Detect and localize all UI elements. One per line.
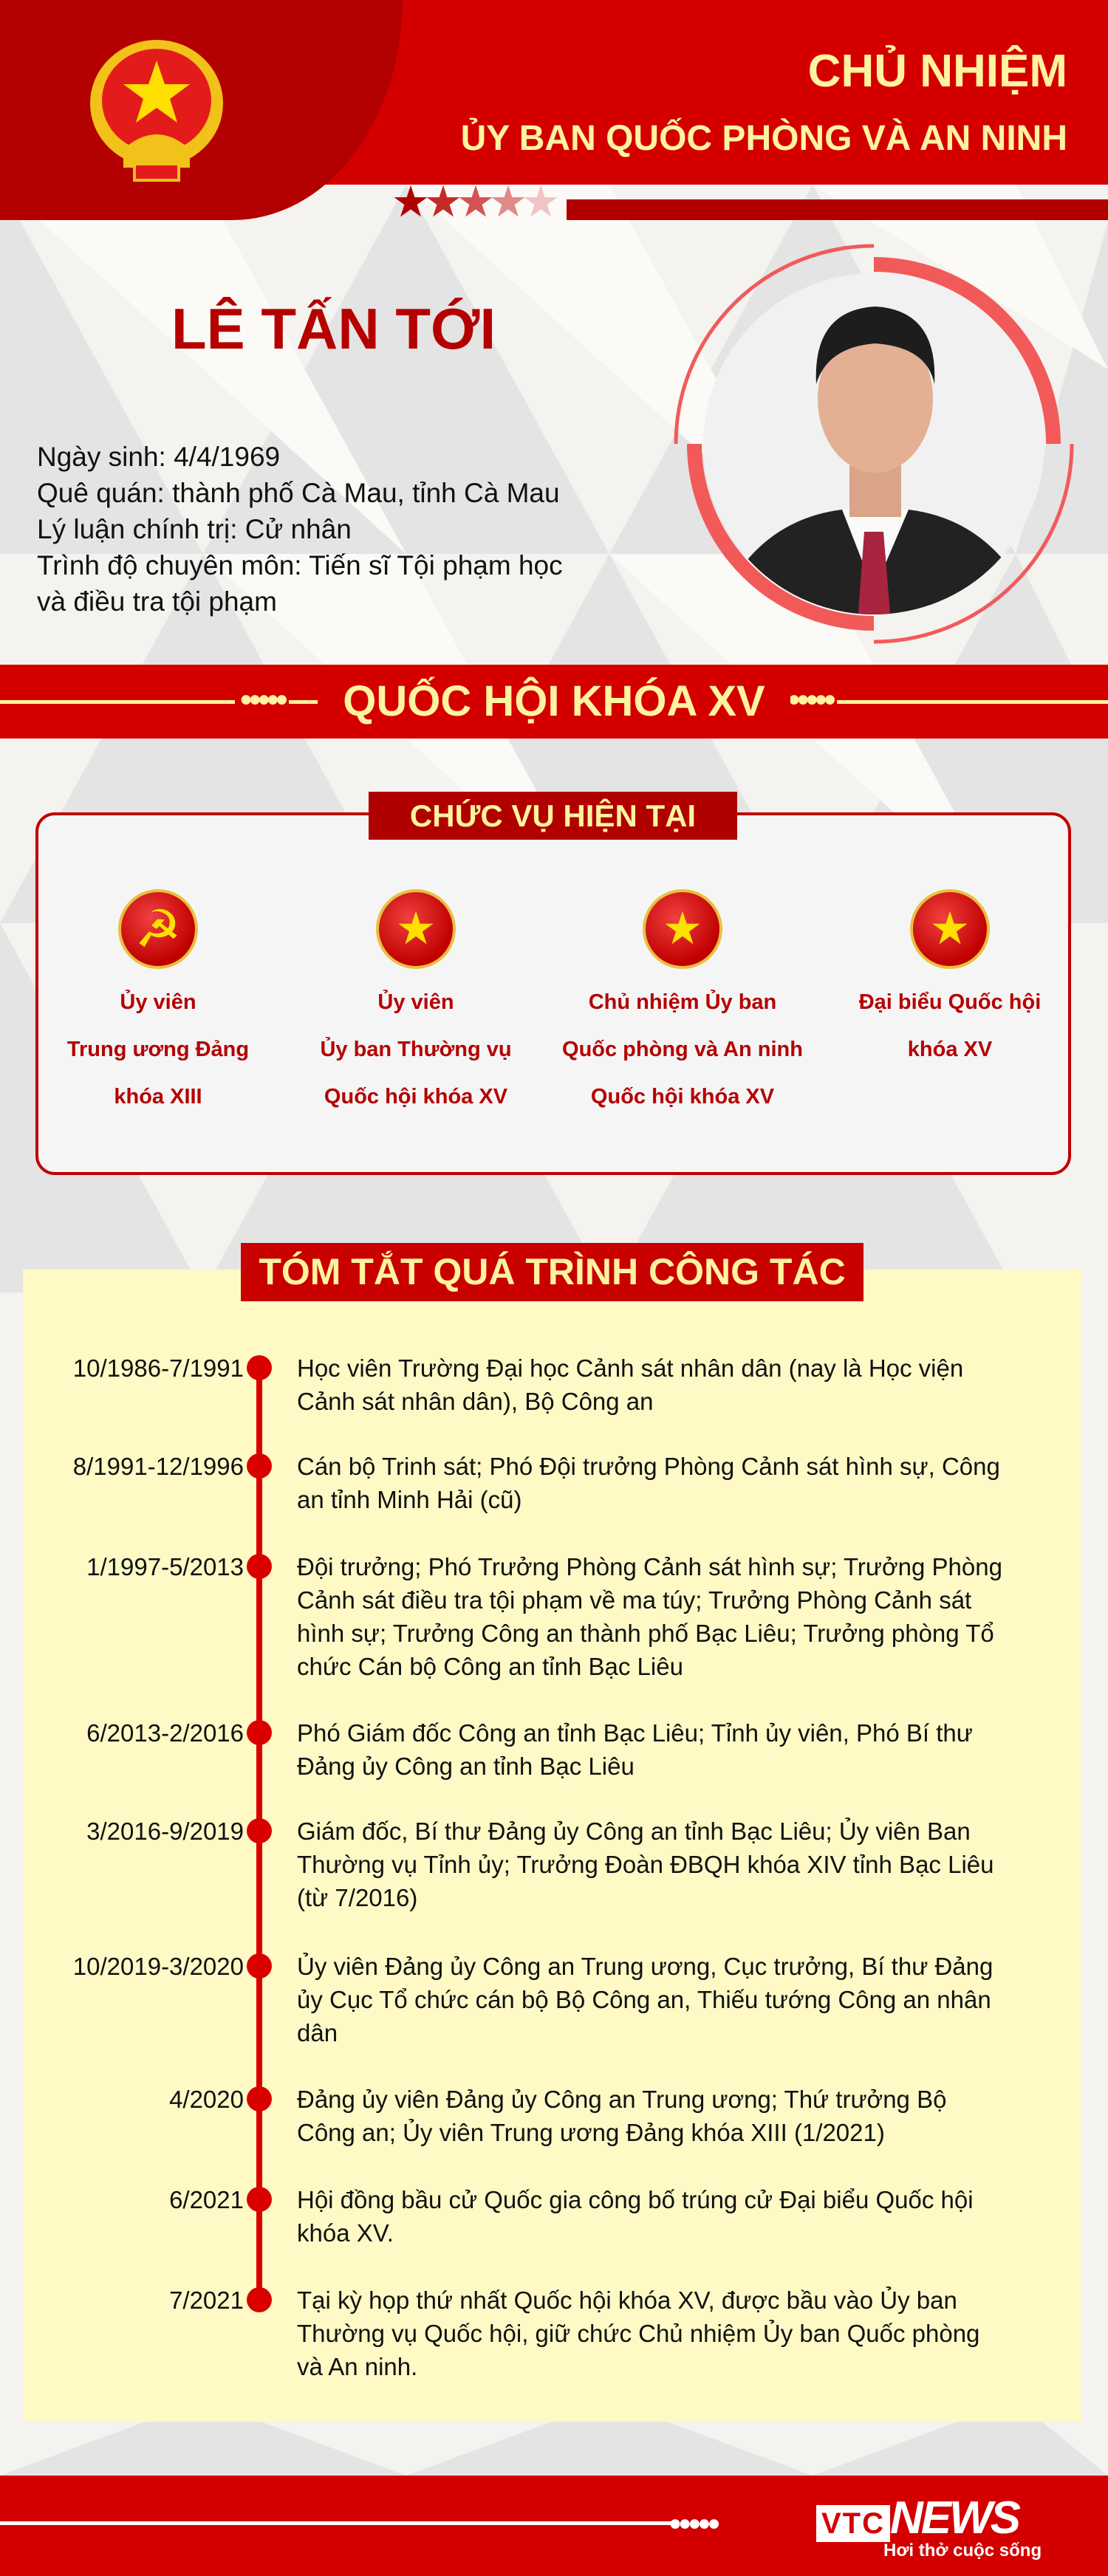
band: Quốc hội khóa XV: QUỐC HỘI KHÓA XV (343, 677, 765, 725)
position 1: Ủy viên (120, 990, 196, 1014)
heading: Chức vụ hiện tại: CHỨC VỤ HIỆN TẠI (410, 798, 696, 833)
entry 4: Đảng ủy Công an tỉnh Bạc Liêu (297, 1753, 635, 1780)
logo: VTC News (816, 2493, 1042, 2560)
entry 5: Giám đốc, Bí thư Đảng ủy Công an tỉnh Bạc Liêu; Ủy viên Ban (297, 1818, 971, 1845)
entry 1: Học viên Trường Đại học Cảnh sát nhân dân (nay là Học viện (297, 1354, 963, 1382)
entry 1 (73, 1354, 963, 1415)
entry 7: Đảng ủy viên Đảng ủy Công an Trung ương; Thứ trưởng Bộ (297, 2086, 946, 2113)
stars: ★★★★★ (393, 183, 555, 222)
position 2: Ủy ban Thường vụ (320, 1038, 512, 1061)
position 1: Trung ương Đảng (67, 1038, 249, 1061)
entry 3: hình sự; Trưởng Công an thành phố Bạc Liêu; Trưởng phòng Tổ (297, 1620, 994, 1647)
title: CHỦ NHIỆM (808, 46, 1067, 97)
entry 4 (86, 1719, 973, 1780)
icon: state emblem 1 (376, 889, 456, 969)
portrait (674, 244, 1074, 644)
position 2 (320, 990, 512, 1109)
position 4: Đại biểu Quốc hội (859, 990, 1041, 1014)
position 4: khóa XV (908, 1038, 992, 1061)
position 1 (67, 990, 249, 1109)
entry 9 (169, 2286, 979, 2380)
entry 3: Đội trưởng; Phó Trưởng Phòng Cảnh sát hình sự; Trưởng Phòng (297, 1553, 1002, 1580)
position 2: Ủy viên (377, 990, 454, 1014)
header bar (567, 199, 1108, 220)
logo: VTC News: VTCNEWS (821, 2493, 1019, 2544)
footer (0, 2476, 1108, 2576)
header dark corner (0, 0, 403, 220)
icon: party emblem (118, 889, 198, 969)
position 3: Quốc hội khóa XV (591, 1085, 774, 1109)
entry 9: và An ninh. (297, 2353, 417, 2380)
entry 6: dân (297, 2019, 338, 2046)
entry 6: ủy Cục Tổ chức cán bộ Bộ Công an, Thiếu tướng Công an nhân (297, 1986, 991, 2013)
personal info: Quê quán: thành phố Cà Mau, tỉnh Cà Mau (37, 478, 560, 508)
personal info: Lý luận chính trị: Cử nhân (37, 514, 352, 544)
entry 8: Hội đồng bầu cử Quốc gia công bố trúng cử Đại biểu Quốc hội (297, 2186, 974, 2213)
icon: state emblem 2 (643, 889, 722, 969)
icon: state emblem 3 (910, 889, 990, 969)
entry 8: khóa XV. (297, 2219, 394, 2247)
entry 2: Cán bộ Trinh sát; Phó Đội trưởng Phòng Cảnh sát hình sự, Công (297, 1453, 1000, 1480)
entry 9: 7/2021 (169, 2286, 244, 2314)
entry 2: 8/1991-12/1996 (73, 1453, 244, 1480)
entry 1: 10/1986-7/1991 (73, 1354, 244, 1382)
footer: ●●●●● (668, 2511, 717, 2535)
entry 8 (169, 2186, 974, 2247)
entry 1: Cảnh sát nhân dân), Bộ Công an (297, 1388, 654, 1415)
header band (0, 0, 1108, 185)
entry 7: Công an; Ủy viên Trung ương Đảng khóa XIII (1/2021) (297, 2119, 885, 2146)
entry 6: 10/2019-3/2020 (73, 1953, 244, 1980)
personal info: Ngày sinh: 4/4/1969 (37, 442, 280, 472)
position 4 (858, 990, 1041, 1061)
entry 9: Tại kỳ họp thứ nhất Quốc hội khóa XV, được bầu vào Ủy ban (297, 2286, 957, 2314)
band: Quốc hội khóa XV: ●●●●● (787, 687, 832, 711)
entry 5 (86, 1818, 994, 1911)
entry 3: chức Cán bộ Công an tỉnh Bạc Liêu (297, 1653, 683, 1680)
panel: current positions (35, 812, 1071, 1175)
name: LÊ TẤN TỚI (171, 296, 496, 361)
heading: Tóm tắt quá trình công tác: TÓM TẮT QUÁ TRÌNH CÔNG TÁC (259, 1251, 846, 1292)
logo: VTC News: Hơi thở cuộc sống (883, 2541, 1042, 2560)
subtitle: ỦY BAN QUỐC PHÒNG VÀ AN NINH (461, 119, 1067, 158)
heading: Tóm tắt quá trình công tác (241, 1243, 864, 1301)
entry 6: Ủy viên Đảng ủy Công an Trung ương, Cục trưởng, Bí thư Đảng (297, 1953, 993, 1980)
position 2: Quốc hội khóa XV (324, 1085, 507, 1109)
entry 3: 1/1997-5/2013 (86, 1553, 244, 1580)
entry 3 (86, 1553, 1002, 1680)
entry 5: (từ 7/2016) (297, 1884, 417, 1911)
entry 6 (73, 1953, 993, 2046)
entry 3: Cảnh sát điều tra tội phạm về ma túy; Trưởng Phòng Cảnh sát (297, 1586, 971, 1614)
personal info (37, 442, 563, 617)
position 3: Chủ nhiệm Ủy ban (589, 990, 776, 1014)
entry 4: Phó Giám đốc Công an tỉnh Bạc Liêu; Tỉnh ủy viên, Phó Bí thư (297, 1719, 973, 1747)
position 3: Quốc phòng và An ninh (562, 1038, 803, 1061)
entry 2 (73, 1453, 1000, 1513)
icon: national emblem (90, 40, 223, 182)
icon: state emblem 1: ★ (397, 908, 434, 950)
icon: state emblem 2: ★ (664, 908, 701, 950)
panel: career timeline (23, 1270, 1081, 2422)
icon: state emblem 3: ★ (931, 908, 968, 950)
band: Quốc hội khóa XV: ●●●●● (239, 687, 284, 711)
personal info: và điều tra tội phạm (37, 586, 277, 617)
entry 8: 6/2021 (169, 2186, 244, 2213)
entry 2: an tỉnh Minh Hải (cũ) (297, 1486, 521, 1513)
personal info: Trình độ chuyên môn: Tiến sĩ Tội phạm học (37, 550, 563, 580)
entry 7 (169, 2086, 946, 2146)
entry 9: Thường vụ Quốc hội, giữ chức Chủ nhiệm Ủy ban Quốc phòng (297, 2320, 979, 2347)
position 3 (562, 990, 803, 1109)
heading: Chức vụ hiện tại (369, 792, 737, 840)
entry 5: 3/2016-9/2019 (86, 1818, 244, 1845)
entry 5: Thường vụ Tỉnh ủy; Trưởng Đoàn ĐBQH khóa XIV tỉnh Bạc Liêu (297, 1851, 994, 1878)
entry 7: 4/2020 (169, 2086, 244, 2113)
entry 4: 6/2013-2/2016 (86, 1719, 244, 1747)
band: Quốc hội khóa XV (0, 665, 1108, 739)
position 1: khóa XIII (114, 1085, 202, 1109)
icon: party emblem: ☭ (135, 900, 181, 958)
timeline line (256, 1368, 262, 2300)
